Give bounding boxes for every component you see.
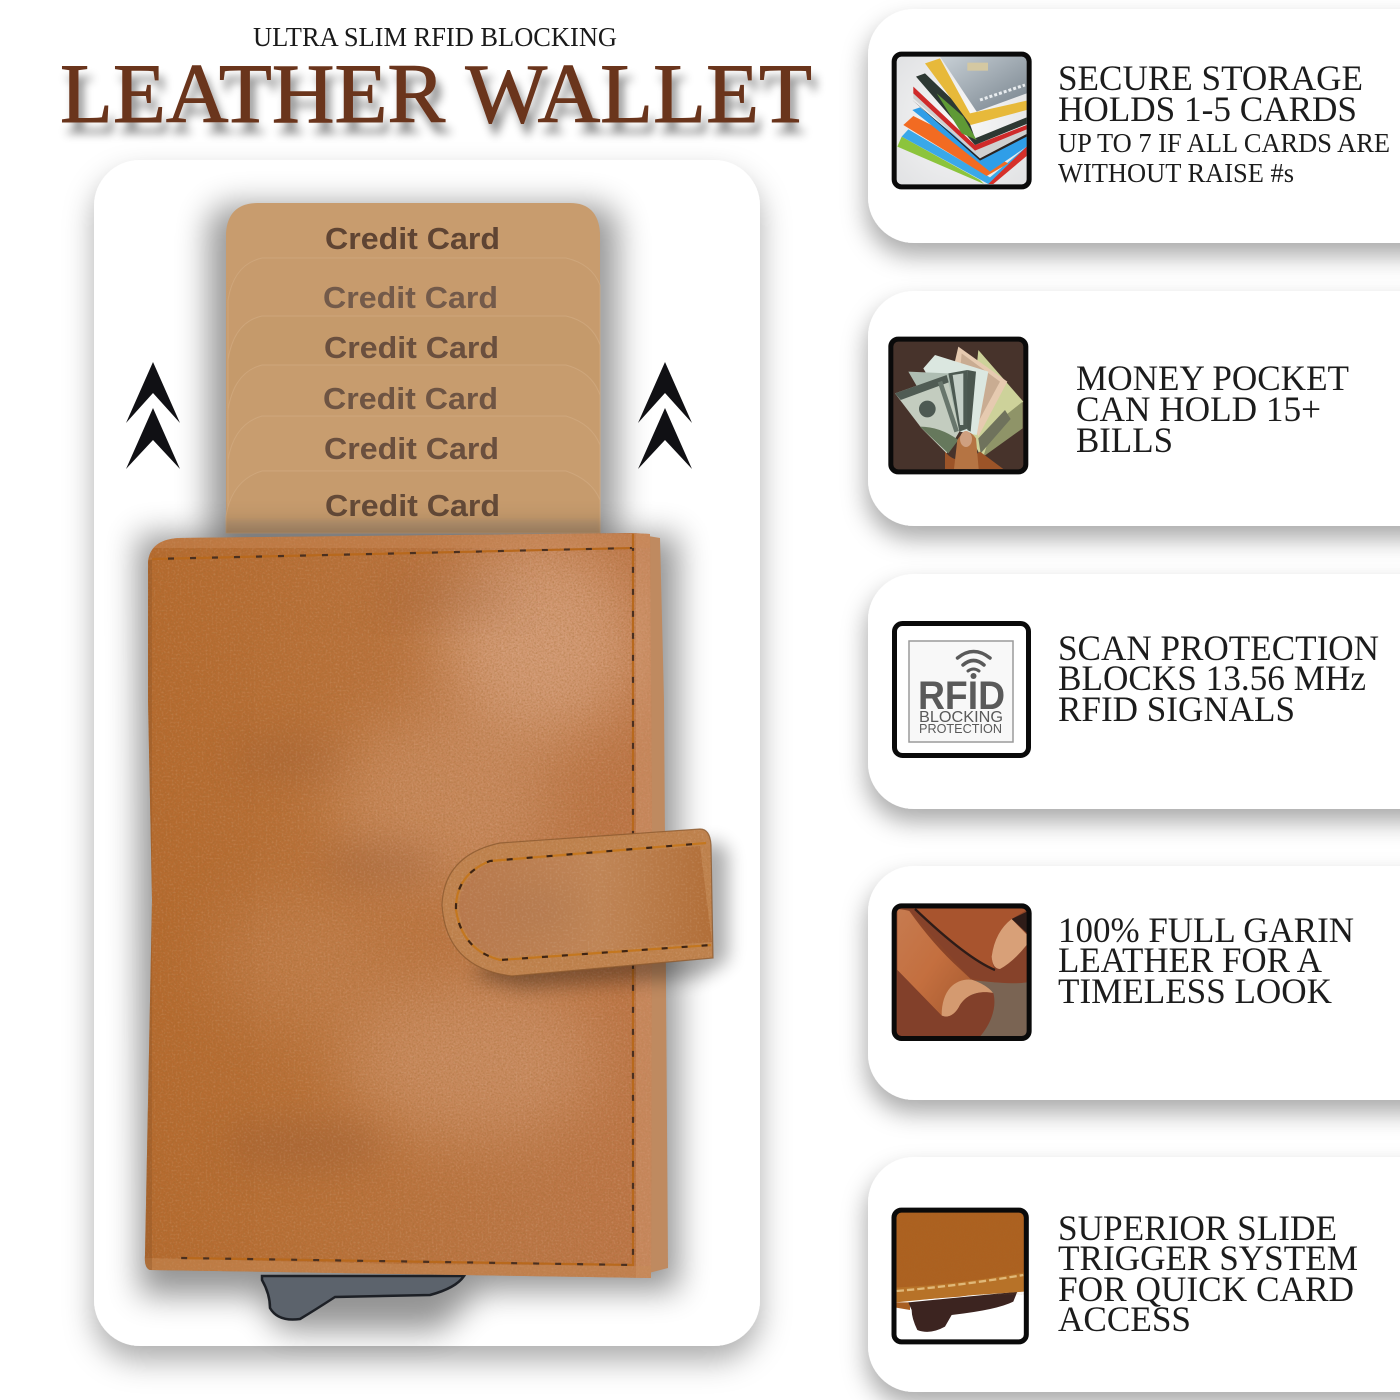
feature text: scan protection: RFID SIGNALS <box>1058 689 1295 729</box>
title: LEATHER WALLET <box>60 47 812 141</box>
feature text: secure storage: SECURE STORAGE <box>1058 58 1363 98</box>
feature text: secure storage: HOLDS 1-5 CARDS <box>1058 89 1357 129</box>
icon: RFID blocking: RFID <box>918 674 1005 718</box>
icon: slide trigger closeup <box>892 1208 1028 1344</box>
icon: cash in hand <box>888 337 1028 475</box>
icon: RFID blocking <box>894 624 1028 756</box>
leather dark patches <box>225 578 520 1172</box>
stitching <box>152 534 633 1265</box>
cards shadow <box>208 205 618 555</box>
feature text: scan protection: BLOCKS 13.56 MHz <box>1058 658 1366 698</box>
feature text: slide trigger: SUPERIOR SLIDE <box>1058 1208 1337 1248</box>
credit cards stack <box>226 203 600 533</box>
card label 5: Credit Card <box>324 431 499 466</box>
wallet front <box>140 530 660 1280</box>
subtitle: ULTRA SLIM RFID BLOCKING <box>253 22 617 52</box>
icon: RFID blocking: BLOCKING <box>919 709 1003 726</box>
slide trigger <box>262 1276 464 1320</box>
card label 6: Credit Card <box>325 488 500 523</box>
icon: stack of cards <box>892 52 1032 190</box>
arrow: left double chevron <box>126 362 180 469</box>
feature text: slide trigger: FOR QUICK CARD <box>1058 1269 1354 1309</box>
wallet <box>140 530 668 1280</box>
feature text: full grain leather: TIMELESS LOOK <box>1058 971 1332 1011</box>
feature text: slide trigger <box>1058 1208 1358 1339</box>
panel: full grain leather <box>868 866 1400 1100</box>
feature text: scan protection: SCAN PROTECTION <box>1058 628 1379 668</box>
strap stitching <box>456 843 711 960</box>
card label 2: Credit Card <box>323 280 498 315</box>
card label 4: Credit Card <box>323 381 498 416</box>
feature text: full grain leather <box>1058 910 1354 1011</box>
panel: money pocket <box>868 291 1400 526</box>
strap <box>442 828 714 976</box>
arrow: right double chevron <box>638 362 692 469</box>
feature text: full grain leather: 100% FULL GARIN <box>1058 910 1354 950</box>
wallet shadow <box>138 535 678 1330</box>
leather light patches <box>210 540 640 1140</box>
panel: secure storage <box>868 9 1400 243</box>
wallet back layer <box>645 536 668 1274</box>
feature text: slide trigger: TRIGGER SYSTEM <box>1058 1238 1358 1278</box>
feature text: money pocket <box>1076 358 1349 460</box>
panel: scan protection <box>868 574 1400 809</box>
feature text: scan protection <box>1058 628 1379 729</box>
feature text: money pocket: BILLS <box>1076 420 1173 460</box>
card label 1: Credit Card <box>325 221 500 256</box>
strap shadow <box>470 840 728 988</box>
panel: slide trigger <box>868 1157 1400 1392</box>
feature text: full grain leather: LEATHER FOR A <box>1058 940 1322 980</box>
panel: product <box>94 160 760 1346</box>
feature text: slide trigger: ACCESS <box>1058 1299 1191 1339</box>
feature text: money pocket: CAN HOLD 15+ <box>1076 389 1321 429</box>
feature text: secure storage: UP TO 7 IF ALL CARDS ARE <box>1058 128 1390 158</box>
feature text: money pocket: MONEY POCKET <box>1076 358 1349 398</box>
card label 3: Credit Card <box>324 330 499 365</box>
icon: leather rolls <box>892 903 1032 1042</box>
icon: RFID blocking: PROTECTION <box>919 721 1002 736</box>
feature text: secure storage: WITHOUT RAISE #s <box>1058 158 1294 188</box>
feature text: secure storage <box>1058 58 1390 188</box>
